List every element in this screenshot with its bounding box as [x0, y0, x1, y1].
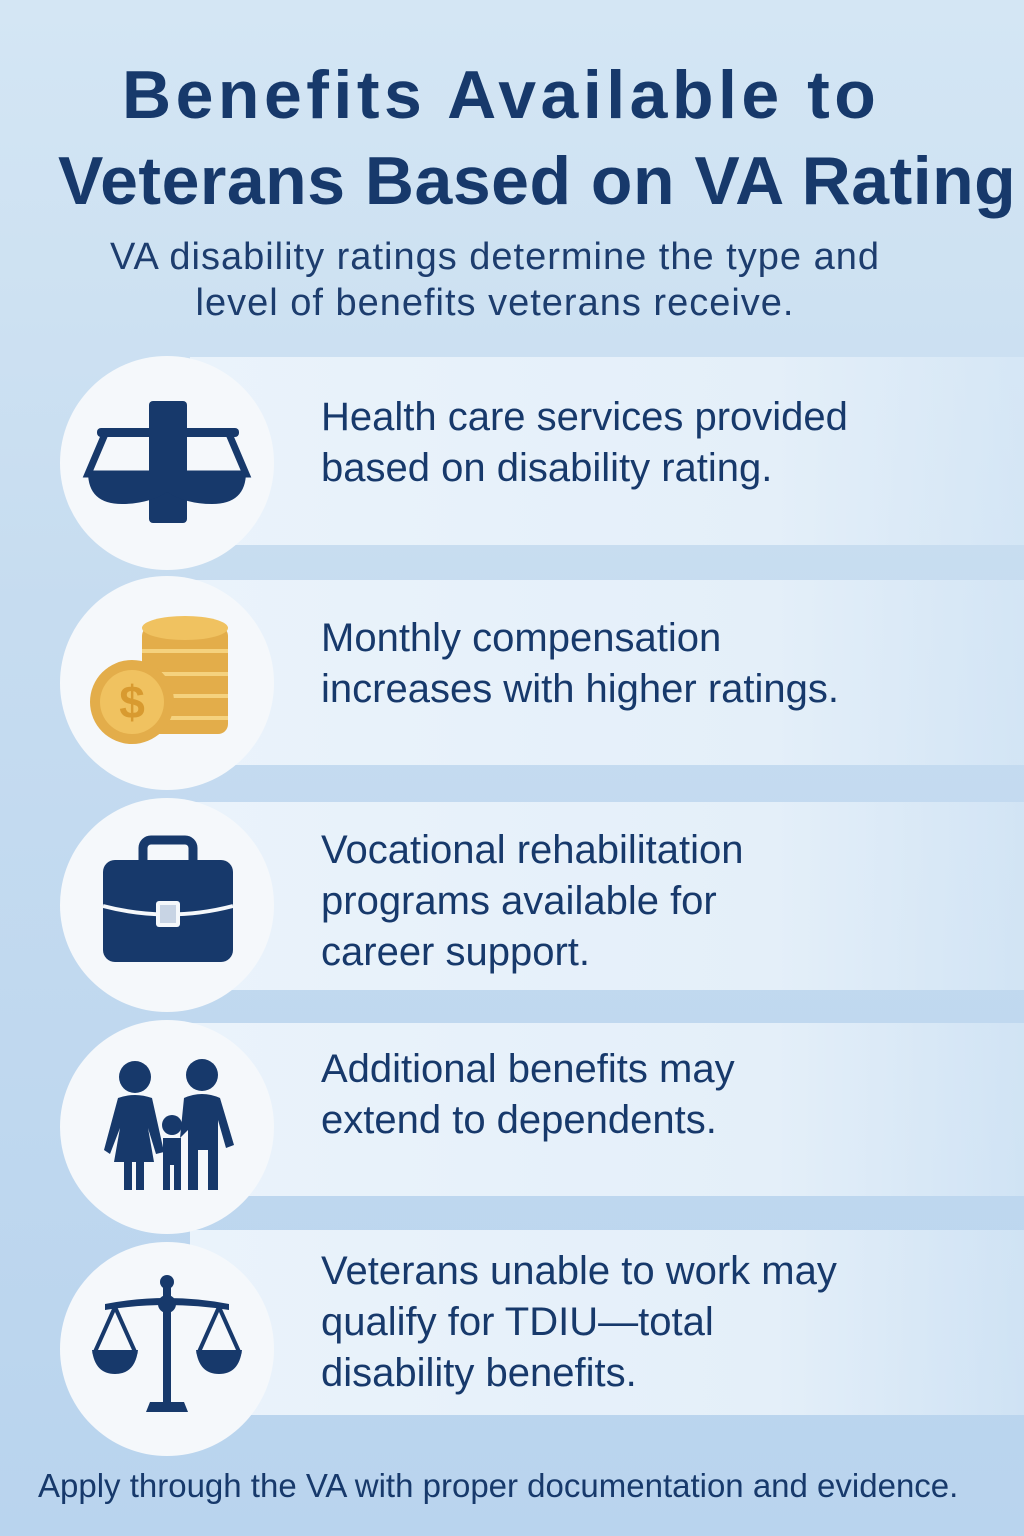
- title: Veterans Based on VA Rating: [58, 143, 1016, 219]
- text 3: career support.: [321, 930, 590, 974]
- footer: Apply through the VA with proper documentation and evidence.: [38, 1467, 958, 1504]
- subtitle: VA disability ratings determine the type and: [110, 236, 880, 278]
- icon: briefcase: [60, 798, 274, 1012]
- band 3: [190, 802, 1024, 990]
- text 2: Monthly compensation: [321, 616, 721, 660]
- text 2: [321, 616, 839, 711]
- subtitle: level of benefits veterans receive.: [196, 282, 794, 324]
- band 4: [190, 1023, 1024, 1196]
- subtitle: [110, 236, 880, 324]
- text 5: disability benefits.: [321, 1351, 637, 1395]
- text 2: increases with higher ratings.: [321, 667, 839, 711]
- icon: health care: [60, 356, 274, 570]
- text 3: programs available for: [321, 879, 717, 923]
- band 2: [190, 580, 1024, 765]
- icon: family: [60, 1020, 274, 1234]
- text 5: qualify for TDIU—total: [321, 1300, 714, 1344]
- text 4: Additional benefits may: [321, 1047, 735, 1091]
- text 3: Vocational rehabilitation: [321, 828, 744, 872]
- text 3: [321, 828, 744, 974]
- text 5: [321, 1249, 837, 1395]
- icon: scales: [60, 1242, 274, 1456]
- band 5: [190, 1230, 1024, 1415]
- text 1: Health care services provided: [321, 395, 848, 439]
- text 5: Veterans unable to work may: [321, 1249, 837, 1293]
- icon: coins: $: [119, 676, 145, 728]
- text 4: [321, 1047, 735, 1142]
- text 1: [321, 395, 848, 490]
- text 1: based on disability rating.: [321, 446, 772, 490]
- band 1: [190, 357, 1024, 545]
- text 4: extend to dependents.: [321, 1098, 717, 1142]
- icon: coins: [60, 576, 274, 790]
- title: Benefits Available to: [122, 57, 880, 133]
- title: [58, 57, 1016, 219]
